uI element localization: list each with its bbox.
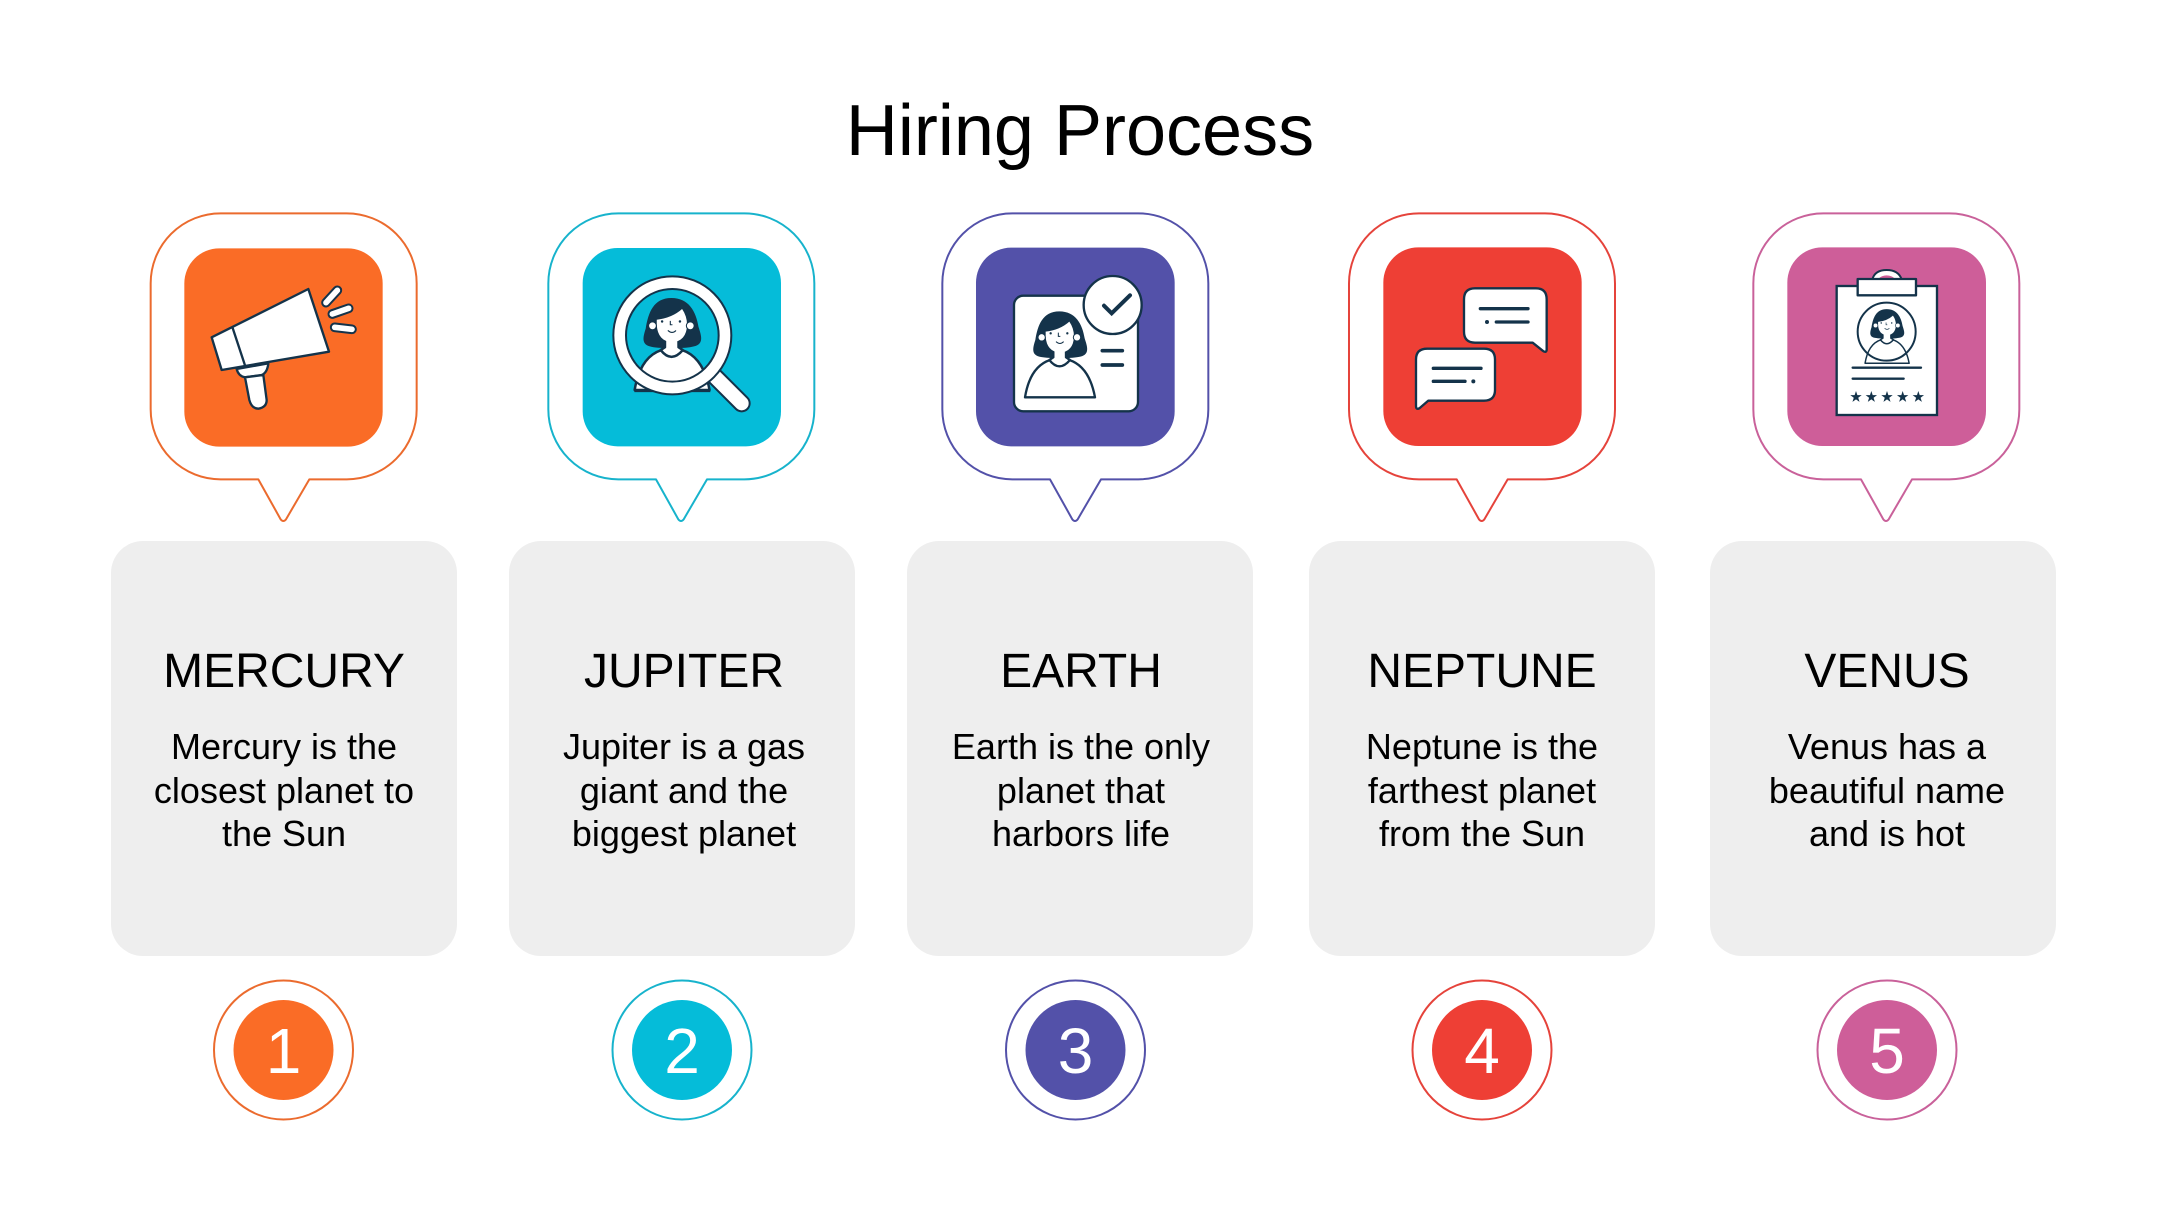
panel: Jupiter card bbox=[509, 541, 855, 956]
icon: interview chat bubbles bbox=[1416, 288, 1547, 409]
panel: step 5 marker bubble bbox=[1753, 213, 2019, 521]
panel: Earth card bbox=[907, 541, 1253, 956]
text: Neptune description: Neptune is the bbox=[1366, 726, 1598, 767]
bubble outline bbox=[1753, 213, 2019, 521]
text: Venus description: beautiful name bbox=[1769, 770, 2005, 811]
bubble outline bbox=[1349, 213, 1615, 521]
step number 4: 4 bbox=[1464, 1015, 1500, 1087]
panel: step 3 marker bubble bbox=[942, 213, 1208, 521]
title: Hiring Process bbox=[846, 91, 1314, 171]
panel: Venus card bbox=[1710, 541, 2056, 956]
text: Neptune description: farthest planet bbox=[1368, 770, 1596, 811]
step number 3: 3 bbox=[1058, 1015, 1093, 1087]
text: Earth description bbox=[952, 726, 1210, 854]
panel: step 4 marker bubble bbox=[1349, 213, 1615, 521]
icon tile bbox=[184, 248, 383, 447]
bubble outline bbox=[942, 213, 1208, 521]
step number 1 bbox=[214, 980, 353, 1120]
step number 2: 2 bbox=[664, 1015, 700, 1087]
heading: Earth: EARTH bbox=[1000, 645, 1162, 698]
panel: step 1 marker bubble bbox=[151, 213, 417, 521]
text: Venus description bbox=[1769, 726, 2005, 854]
heading: Jupiter: JUPITER bbox=[584, 645, 784, 698]
icon: magnifying glass over candidate bbox=[620, 283, 742, 403]
bubble outline bbox=[548, 213, 814, 521]
icon tile bbox=[1787, 247, 1986, 446]
step number 5: 5 bbox=[1869, 1015, 1905, 1087]
text: Jupiter description: giant and the bbox=[580, 770, 788, 811]
panel: Mercury card bbox=[111, 541, 457, 956]
icon tile bbox=[583, 248, 781, 446]
panel: Neptune card bbox=[1309, 541, 1655, 956]
text: Earth description: planet that bbox=[997, 770, 1165, 811]
step number 4 bbox=[1412, 980, 1552, 1120]
step number 2 bbox=[612, 980, 752, 1120]
text: Jupiter description: biggest planet bbox=[572, 813, 796, 854]
text: Earth description: Earth is the only bbox=[952, 726, 1210, 767]
step number 3 bbox=[1006, 980, 1145, 1120]
text: Venus description: and is hot bbox=[1809, 813, 1965, 854]
text: Jupiter description bbox=[563, 726, 805, 854]
step number 1: 1 bbox=[266, 1015, 301, 1087]
panel: step 2 marker bubble bbox=[548, 213, 814, 521]
heading: Neptune: NEPTUNE bbox=[1367, 645, 1597, 698]
bubble outline bbox=[151, 213, 417, 521]
text: Neptune description: from the Sun bbox=[1379, 813, 1585, 854]
text: Venus description: Venus has a bbox=[1788, 726, 1987, 767]
text: Mercury description: closest planet to bbox=[154, 770, 414, 811]
heading: Mercury: MERCURY bbox=[163, 645, 405, 698]
icon: candidate rating clipboard bbox=[1837, 270, 1937, 415]
heading: Venus: VENUS bbox=[1804, 645, 1970, 698]
icon: approved candidate profile card bbox=[1014, 276, 1142, 411]
text: Mercury description: the Sun bbox=[222, 813, 346, 854]
text: Mercury description bbox=[154, 726, 414, 854]
icon tile bbox=[1383, 247, 1582, 446]
text: Neptune description bbox=[1366, 726, 1598, 854]
text: Mercury description: Mercury is the bbox=[171, 726, 397, 767]
icon: megaphone bbox=[212, 289, 352, 409]
text: Jupiter description: Jupiter is a gas bbox=[563, 726, 805, 767]
text: Earth description: harbors life bbox=[992, 813, 1170, 854]
icon tile bbox=[976, 248, 1175, 446]
step number 5 bbox=[1818, 980, 1956, 1120]
